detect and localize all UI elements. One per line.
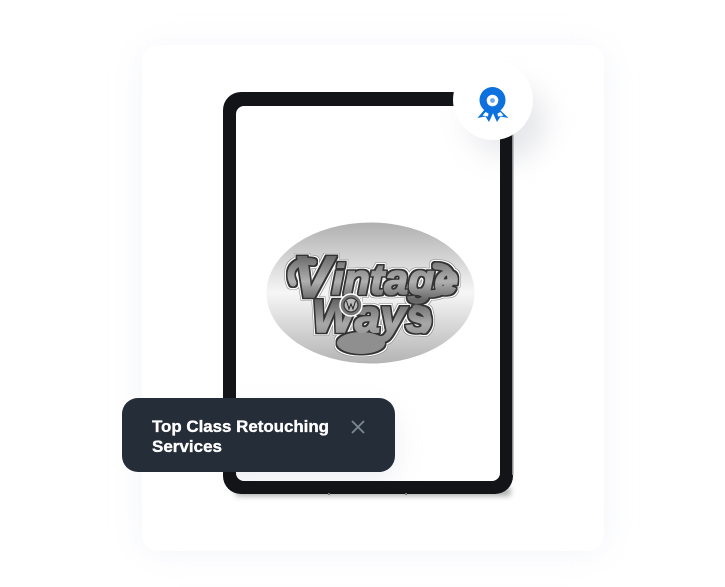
tablet buttons [328,493,407,495]
tablet shadow [235,487,511,496]
callout box [122,398,395,472]
logo word: Vintage: V [293,245,336,310]
logo tail blob [337,332,385,354]
logo swash: V [291,261,313,283]
tablet screen tint [130,80,543,480]
badge shadow on card [470,84,546,160]
logo swash: e tail [420,266,451,294]
logo: Vintage Ways oval [266,222,474,364]
callout text: Services [152,438,222,456]
logo word: Vintage: intage [332,256,458,304]
logo swash: s blob [416,308,428,330]
logo word: Ways: Ways [312,290,431,342]
logo emblem [340,294,362,316]
logo oval background [266,222,474,364]
badge circle [453,60,533,140]
callout: Top Class Retouching Services [122,398,395,472]
badge [453,60,533,140]
tablet frame [223,92,513,494]
icon: close [352,421,364,433]
tablet screen [236,106,500,481]
panel: background card [142,45,604,551]
callout text: Top Class Retouching [152,418,329,436]
tablet device [223,92,514,500]
logo lettering [291,245,458,354]
tablet edge highlight [512,130,514,475]
icon: award ribbon [478,87,508,122]
